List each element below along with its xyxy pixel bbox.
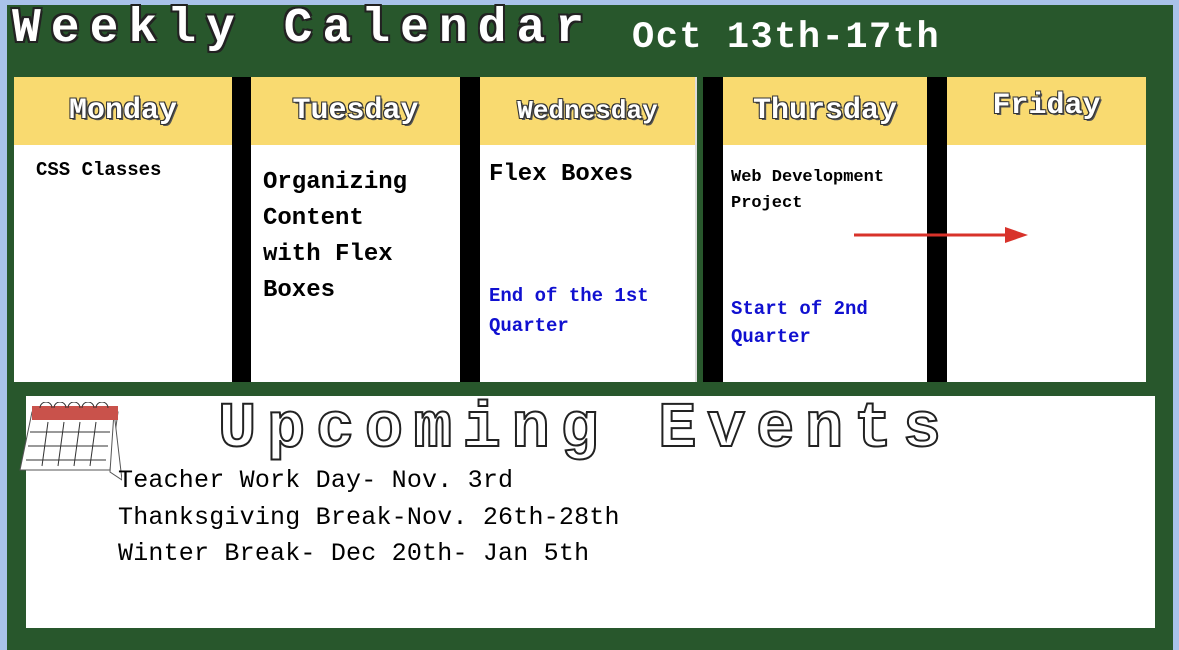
- separators: [232, 77, 251, 382]
- events list: [118, 466, 620, 568]
- events list: Thanksgiving Break-Nov. 26th-28th: [118, 503, 620, 532]
- panel: thursday: Thursday: [753, 94, 897, 128]
- panel: monday: CSS Classes: [36, 159, 161, 181]
- panel: tuesday: Tuesday: [292, 94, 419, 128]
- title: Weekly Calendar: [12, 2, 594, 56]
- events list: Winter Break- Dec 20th- Jan 5th: [118, 539, 589, 568]
- panel: monday: Monday: [69, 94, 177, 128]
- panel: thursday: Web Development: [731, 168, 884, 187]
- panel: tuesday: [251, 77, 460, 382]
- panel: thursday: Start of 2nd: [731, 298, 868, 320]
- panel: friday: [947, 77, 1146, 382]
- arrow: [854, 227, 1028, 243]
- panel: tuesday: Content: [263, 205, 364, 232]
- date range: Oct 13th-17th: [632, 17, 940, 59]
- panel: wednesday: Quarter: [489, 315, 569, 337]
- panel: thursday: Quarter: [731, 326, 811, 348]
- panel: tuesday: Organizing: [263, 169, 407, 196]
- panel: friday: Friday: [992, 89, 1101, 123]
- panel: upcoming events: [26, 396, 1155, 628]
- panel: wednesday: End of the 1st: [489, 285, 649, 307]
- panel: wednesday: Wednesday: [517, 96, 658, 126]
- icon: calendar: [20, 402, 122, 480]
- panel: monday: [14, 77, 232, 382]
- panel: wednesday: [480, 77, 697, 382]
- panel: thursday: Project: [731, 194, 802, 213]
- panel: tuesday: with Flex: [263, 241, 393, 268]
- events list: Teacher Work Day- Nov. 3rd: [118, 466, 513, 495]
- panel: thursday: [723, 77, 927, 382]
- heading: Upcoming Events: [218, 394, 952, 466]
- panel: tuesday: Boxes: [263, 277, 335, 304]
- panel: wednesday: Flex Boxes: [489, 161, 633, 188]
